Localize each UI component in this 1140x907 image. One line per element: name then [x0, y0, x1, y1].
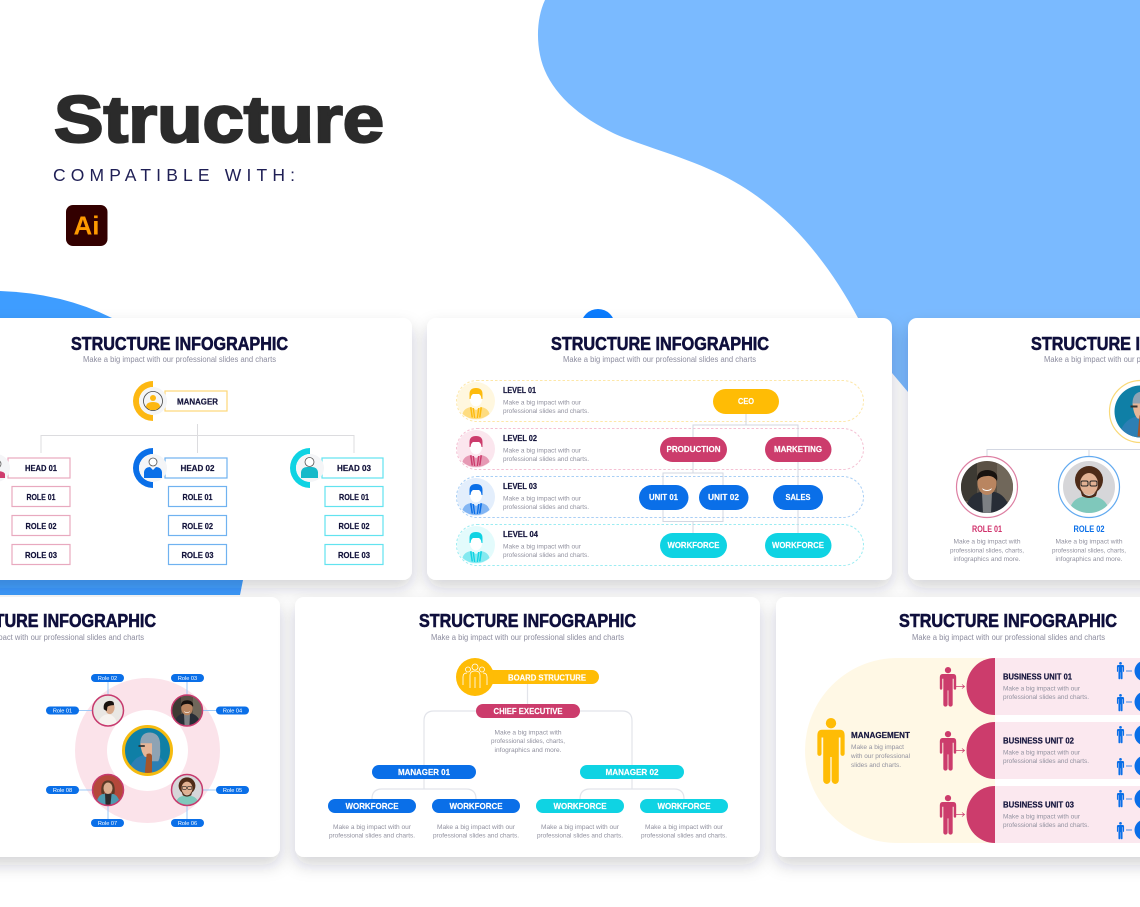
- role labels: Role 02: [98, 676, 117, 682]
- connector lines: [372, 684, 684, 799]
- management: MANAGEMENT: [851, 730, 911, 740]
- pill: workforce right: WORKFORCE: [772, 541, 825, 550]
- pill: CEO: CEO: [738, 397, 755, 406]
- pill: manager 01: MANAGER 01: [398, 768, 450, 777]
- pill: manager 01: [372, 765, 476, 779]
- column: head 02: ROLE 03: [182, 550, 214, 560]
- role labels: Role 07: [98, 821, 117, 827]
- workforce 4: [640, 799, 728, 840]
- role labels: Role 01: [53, 708, 72, 714]
- connector lines: [663, 414, 798, 533]
- column: head 01: ROLE 03: [25, 550, 57, 560]
- level 01: professional slides and charts.: [503, 409, 589, 415]
- panel title: STRUCTURE INFOGRAPHIC: [551, 333, 769, 354]
- level 04: professional slides and charts.: [503, 553, 589, 559]
- management: Make a big impact: [851, 745, 904, 751]
- level 04: LEVEL 04: [503, 529, 538, 539]
- pill: workforce left: WORKFORCE: [668, 541, 720, 550]
- business unit 03: BUSINESS UNIT 03: [1003, 800, 1074, 810]
- management: slides and charts.: [851, 763, 901, 769]
- panel subtitle: Make a big impact with our professional slides and charts: [83, 355, 276, 364]
- workforce 1: Make a big impact with our: [333, 825, 411, 831]
- workforce 2: professional slides and charts.: [433, 834, 519, 840]
- panel: business units: [776, 597, 1140, 857]
- column: head 01: [0, 454, 70, 564]
- panel: roles with photos: [908, 318, 1140, 580]
- business unit 01: professional slides and charts.: [1003, 695, 1089, 701]
- role 01: professional slides, charts,: [950, 548, 1024, 554]
- pill: unit 02: UNIT 02: [708, 493, 739, 502]
- pill: manager 02: MANAGER 02: [606, 768, 659, 777]
- board structure header with icon: BOARD STRUCTURE: [508, 674, 586, 682]
- background blob: small blue circle: [581, 309, 615, 343]
- role 01: [950, 456, 1024, 563]
- text: chief executive description: Make a big impact with: [494, 730, 562, 736]
- level 02: professional slides and charts.: [503, 457, 589, 463]
- column: head 02: ROLE 02: [182, 521, 213, 531]
- pink ring: [91, 694, 204, 807]
- heading: Structure: Structure: [54, 82, 384, 156]
- panel title: STRUCTURE INFOGRAPHIC: [419, 610, 636, 631]
- business unit 02: professional slides and charts.: [1003, 759, 1089, 765]
- connector lines: [987, 450, 1140, 456]
- role 02: [1052, 456, 1126, 563]
- node: manager: MANAGER: [177, 396, 218, 406]
- pill: chief executive: [476, 704, 580, 718]
- workforce 3: WORKFORCE: [554, 802, 607, 811]
- level 04: [457, 526, 589, 564]
- business unit 02: Make a big impact with our: [1003, 750, 1080, 756]
- level 02: LEVEL 02: [503, 433, 537, 443]
- business unit 03: Make a big impact with our: [1003, 814, 1080, 820]
- column: head 01: ROLE 02: [26, 521, 57, 531]
- panel: manager and heads: [0, 318, 412, 580]
- business unit 03: [940, 786, 1140, 843]
- level 03: Make a big impact with our: [503, 496, 581, 502]
- business unit 02: [940, 722, 1140, 779]
- pill: production: PRODUCTION: [666, 445, 721, 454]
- level 01: Make a big impact with our: [503, 400, 581, 406]
- photo: lead: [1110, 380, 1140, 442]
- column: head 03: HEAD 03: [337, 463, 371, 473]
- level 02: Make a big impact with our: [503, 448, 581, 454]
- icon: Adobe Illustrator: Ai: [74, 210, 100, 240]
- role 01: infographics and more.: [954, 557, 1021, 563]
- workforce 4: Make a big impact with our: [645, 825, 723, 831]
- workforce 1: professional slides and charts.: [329, 834, 415, 840]
- column: head 03: ROLE 02: [338, 521, 370, 531]
- node: manager: [133, 381, 227, 421]
- icon: group of people: [463, 664, 487, 688]
- role labels: Role 08: [53, 788, 72, 794]
- workforce 3: Make a big impact with our: [541, 825, 619, 831]
- centre photo: [122, 726, 172, 776]
- level 01: [457, 382, 589, 420]
- column: head 02: [133, 448, 227, 564]
- business unit 01: BUSINESS UNIT 01: [1003, 672, 1072, 682]
- workforce 4: WORKFORCE: [658, 802, 711, 811]
- panel: board structure: [295, 597, 760, 857]
- role labels: Role 05: [223, 788, 242, 794]
- panel title: STRUCTURE INFOGRAPHIC: [71, 333, 288, 354]
- text: chief executive description: infographics and more.: [494, 748, 562, 754]
- level 03: LEVEL 03: [503, 481, 537, 491]
- business unit 02: BUSINESS UNIT 02: [1003, 736, 1074, 746]
- workforce 2: Make a big impact with our: [437, 825, 515, 831]
- board structure header with icon: [456, 658, 599, 696]
- panel subtitle: Make a big impact with our professional slides and charts: [912, 633, 1105, 642]
- pill: marketing: MARKETING: [774, 445, 822, 454]
- pill: sales: [773, 485, 823, 510]
- role 02: ROLE 02: [1074, 524, 1104, 534]
- text: chief executive description: [491, 730, 565, 754]
- level 02: [457, 430, 589, 468]
- workforce 1: WORKFORCE: [346, 802, 399, 811]
- pill: unit 01: UNIT 01: [649, 493, 678, 502]
- connector lines: [41, 424, 354, 453]
- pill: CEO: [713, 389, 779, 414]
- background blob: left blue: [0, 291, 243, 595]
- role 01: Make a big impact with: [954, 540, 1020, 546]
- subheading: compatible with: COMPATIBLE WITH:: [53, 165, 295, 185]
- workforce 2: [432, 799, 520, 840]
- workforce 4: professional slides and charts.: [641, 834, 727, 840]
- business unit 01: [940, 658, 1140, 715]
- workforce 1: [328, 799, 416, 840]
- panel: radial team: [0, 597, 280, 857]
- pill: workforce left: [660, 533, 727, 558]
- panel subtitle: Make a big impact with our professional slides and charts: [431, 633, 624, 642]
- pill: workforce right: [765, 533, 832, 558]
- text: chief executive description: professional slides, charts,: [491, 739, 565, 745]
- pill: chief executive: CHIEF EXECUTIVE: [494, 707, 563, 716]
- role photos: [92, 695, 203, 806]
- business unit 01: Make a big impact with our: [1003, 686, 1080, 692]
- role labels: [46, 674, 249, 827]
- column: head 03: [290, 448, 383, 564]
- pill: sales: SALES: [786, 493, 811, 502]
- level 04: Make a big impact with our: [503, 544, 581, 550]
- management: with our professional: [850, 754, 910, 760]
- level 03: [457, 478, 589, 516]
- level 03: professional slides and charts.: [503, 505, 589, 511]
- background blob: light blue: [538, 0, 1140, 392]
- cream management area: [805, 658, 995, 843]
- management: [817, 718, 911, 784]
- panel: levels org chart: [427, 318, 892, 580]
- column: head 02: ROLE 01: [182, 492, 213, 502]
- level row bands: [456, 380, 864, 566]
- column: head 02: HEAD 02: [180, 463, 215, 473]
- role labels: Role 06: [178, 821, 197, 827]
- business unit 03: professional slides and charts.: [1003, 823, 1089, 829]
- panel subtitle: Make a big impact with our professional slides and charts: [563, 355, 756, 364]
- role 02: professional slides, charts,: [1052, 548, 1126, 554]
- role 02: infographics and more.: [1056, 557, 1123, 563]
- connector lines: [79, 682, 216, 819]
- column: head 03: ROLE 01: [339, 492, 369, 502]
- role labels: Role 04: [223, 708, 242, 714]
- pill: production: [660, 437, 727, 462]
- pill: manager 02: [580, 765, 684, 779]
- workforce 3: [536, 799, 624, 840]
- column: head 01: ROLE 01: [26, 492, 56, 502]
- pill: unit 01: [639, 485, 688, 510]
- pill: marketing: [765, 437, 832, 462]
- role 02: Make a big impact with: [1056, 540, 1122, 546]
- column: head 01: HEAD 01: [25, 463, 57, 473]
- workforce 2: WORKFORCE: [450, 802, 503, 811]
- workforce 3: professional slides and charts.: [537, 834, 623, 840]
- role 01: ROLE 01: [972, 524, 1002, 534]
- icon: Adobe Illustrator: [66, 205, 108, 246]
- role labels: Role 03: [178, 676, 197, 682]
- pill: unit 02: [699, 485, 748, 510]
- level 01: LEVEL 01: [503, 385, 536, 395]
- column: head 03: ROLE 03: [338, 550, 370, 560]
